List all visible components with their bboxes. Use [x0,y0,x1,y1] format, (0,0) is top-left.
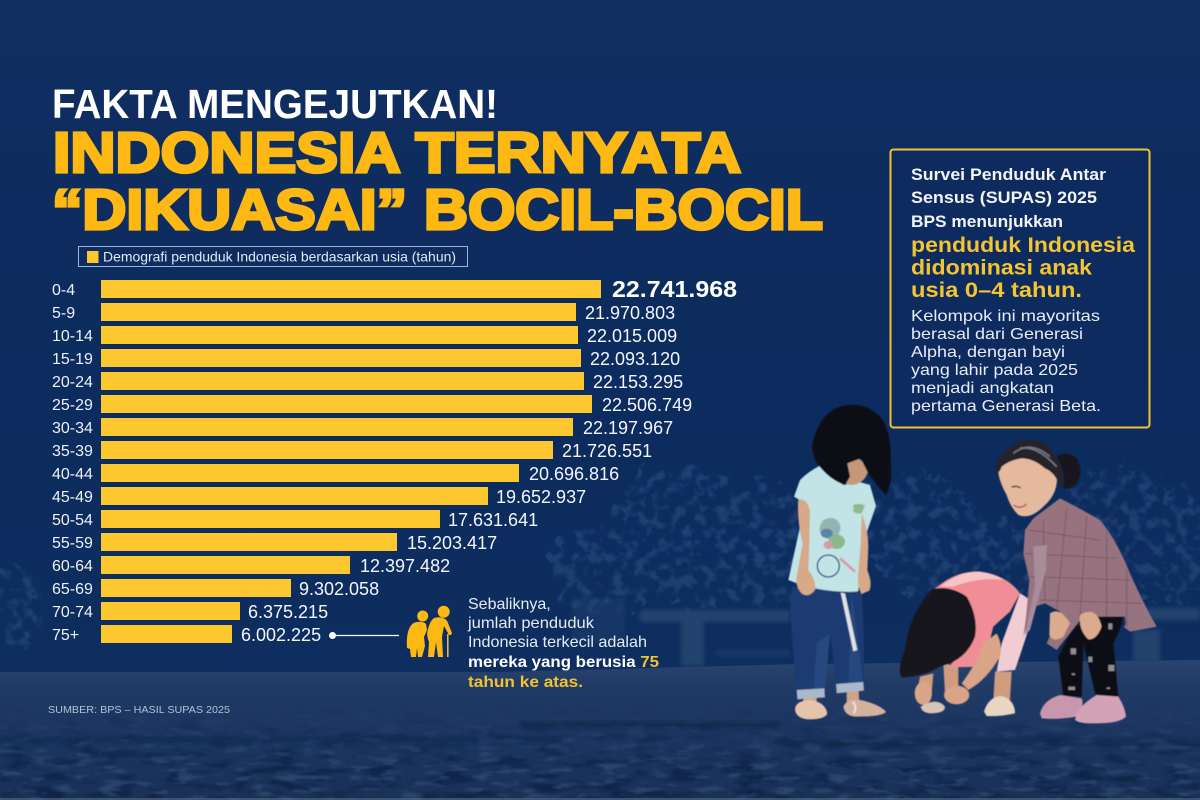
text: smallest group note: jumlah penduduk [467,615,595,632]
survey highlight: didominasi anak [911,256,1092,280]
survey highlight [911,233,1136,302]
child: standing left [788,405,891,719]
survey detail: berasal dari Generasi [911,326,1083,343]
background [0,460,1200,800]
survey intro: Survei Penduduk Antar [911,166,1107,184]
survey detail: Kelompok ini mayoritas [911,308,1100,325]
values: 9.302.058 [299,579,379,599]
bench and railing [572,598,1200,666]
age labels: 50-54 [52,512,93,529]
child: standing right [995,439,1157,723]
age labels: 45-49 [52,489,93,506]
values: 22.506.749 [602,395,692,415]
text: smallest group note: tahun ke atas. [468,674,583,691]
age labels: 20-24 [52,374,93,391]
values: 21.970.803 [585,303,675,323]
callout connector [329,632,399,639]
values: 17.631.641 [448,510,538,530]
age labels: 5-9 [52,305,75,322]
text: smallest group note: Indonesia terkecil adalah [468,634,647,651]
age labels [52,282,93,644]
survey intro: Sensus (SUPAS) 2025 [911,189,1097,207]
age labels: 70-74 [52,604,93,621]
icon: elderly couple [407,606,452,657]
legend: Demografi penduduk Indonesia berdasarkan usia (tahun) [103,248,456,264]
survey detail: yang lahir pada 2025 [911,362,1078,379]
age labels: 35-39 [52,443,93,460]
values: 22.197.967 [583,418,673,438]
age labels: 55-59 [52,535,93,552]
survey detail: menjadi angkatan [911,380,1054,397]
ground [0,660,1200,800]
age labels: 60-64 [52,558,93,575]
survey detail: pertama Generasi Beta. [911,398,1101,415]
values: 12.397.482 [360,556,450,576]
survey intro [911,166,1107,231]
values [241,276,737,645]
age labels: 10-14 [52,328,93,345]
illustration: three children [788,405,1157,723]
title line 1: FAKTA MENGEJUTKAN! [52,81,498,127]
age labels: 30-34 [52,420,93,437]
values: 22.093.120 [590,349,680,369]
age labels: 75+ [52,627,79,644]
title [52,81,823,242]
values: 15.203.417 [407,533,497,553]
title line 2: INDONESIA TERNYATA [53,121,741,185]
bars [101,280,601,643]
text: smallest group note [467,596,659,691]
age labels: 40-44 [52,466,93,483]
values: 6.002.225 [241,625,321,645]
text: smallest group note: Sebaliknya, [468,596,551,613]
child: crouching middle [900,572,1034,716]
values: 22.015.009 [587,326,677,346]
survey highlight: usia 0–4 tahun. [911,278,1082,302]
survey intro: BPS menunjukkan [911,213,1063,231]
values: 20.696.816 [529,464,619,484]
title line 3: “DIKUASAI” BOCIL-BOCIL [52,178,823,242]
panel: survey summary [890,150,1150,428]
bar chart [52,276,737,645]
survey highlight: penduduk Indonesia [911,233,1136,257]
values: 22.153.295 [593,372,683,392]
age labels: 15-19 [52,351,93,368]
survey detail [911,308,1101,415]
text: smallest group note: mereka yang berusia 75 [468,654,659,671]
age labels: 0-4 [52,282,75,299]
values: 22.741.968 [612,276,737,302]
survey detail: Alpha, dengan bayi [911,344,1065,361]
age labels: 65-69 [52,581,93,598]
values: 6.375.215 [248,602,328,622]
values: 19.652.937 [496,487,586,507]
age labels: 25-29 [52,397,93,414]
source: SUMBER: BPS – HASIL SUPAS 2025 [48,704,230,716]
trees [0,465,1200,652]
values: 21.726.551 [562,441,652,461]
